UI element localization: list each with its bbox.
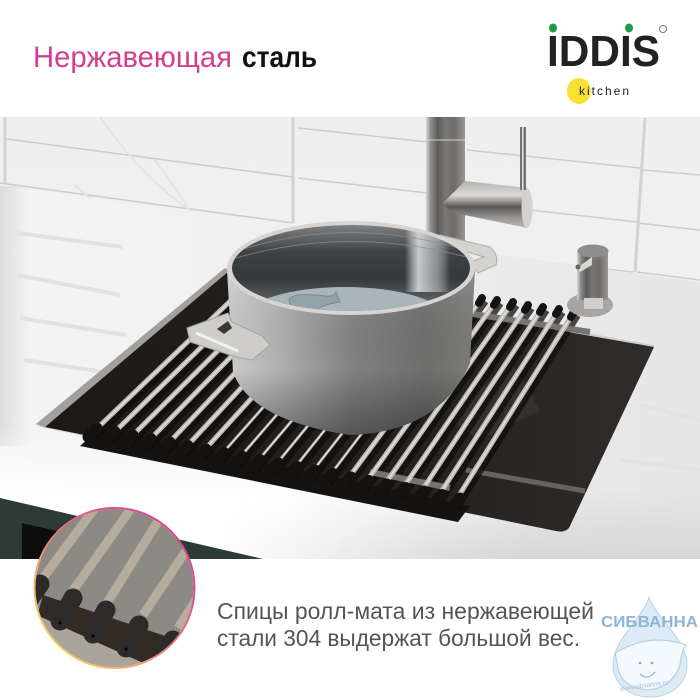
watermark: Sibvanna: www.sibvanna.ru xyxy=(618,679,669,693)
faucet xyxy=(426,117,532,247)
inset steel rods xyxy=(40,510,193,630)
logo: IDDIS kitchen xyxy=(547,24,666,104)
counter front lip xyxy=(0,442,700,559)
steel rods: under the pot xyxy=(226,406,363,470)
sink basin xyxy=(36,268,654,532)
mat shadow strip xyxy=(80,428,470,522)
title: сталь xyxy=(242,41,317,74)
pot interior xyxy=(232,225,470,311)
pot xyxy=(187,221,497,435)
rod shadows xyxy=(102,301,580,504)
inset detail circle xyxy=(34,507,196,669)
cabinet front xyxy=(0,498,263,559)
photo: kitchen sink with pot on roll mat xyxy=(0,117,700,559)
caption text: Спицы ролл-мата из нержавеющей xyxy=(217,598,594,624)
left handle xyxy=(187,313,270,360)
inset rubber tips xyxy=(28,584,173,662)
bath xyxy=(615,640,686,690)
wall tiles xyxy=(0,117,700,282)
right handle xyxy=(438,235,497,273)
roll mat xyxy=(80,294,590,522)
logo: IDDIS kitchen: IDDIS xyxy=(547,27,660,76)
watermark: Sibvanna: СИБВАННА xyxy=(601,614,698,631)
soap dispenser xyxy=(567,244,613,317)
logo: IDDIS kitchen: kitchen xyxy=(579,84,629,98)
caption text xyxy=(217,598,594,651)
steel rods: outer left group xyxy=(99,299,254,446)
water drop xyxy=(613,597,687,697)
inset lower plate xyxy=(41,617,141,667)
watermark: Sibvanna xyxy=(601,597,698,697)
inset dark strip xyxy=(38,595,175,662)
steel rods: right group xyxy=(350,304,572,494)
countertop with tile reflections xyxy=(0,186,700,511)
rod highlights xyxy=(100,302,570,493)
cross bars xyxy=(370,314,590,488)
title: Нержавеющая xyxy=(33,41,232,74)
water and glass lid xyxy=(268,287,428,311)
front rubber tips xyxy=(88,428,460,507)
back rubber tips xyxy=(479,298,574,317)
pot rim xyxy=(227,221,475,315)
pot body xyxy=(227,270,475,435)
caption text: стали 304 выдержат большой вес. xyxy=(217,625,580,651)
